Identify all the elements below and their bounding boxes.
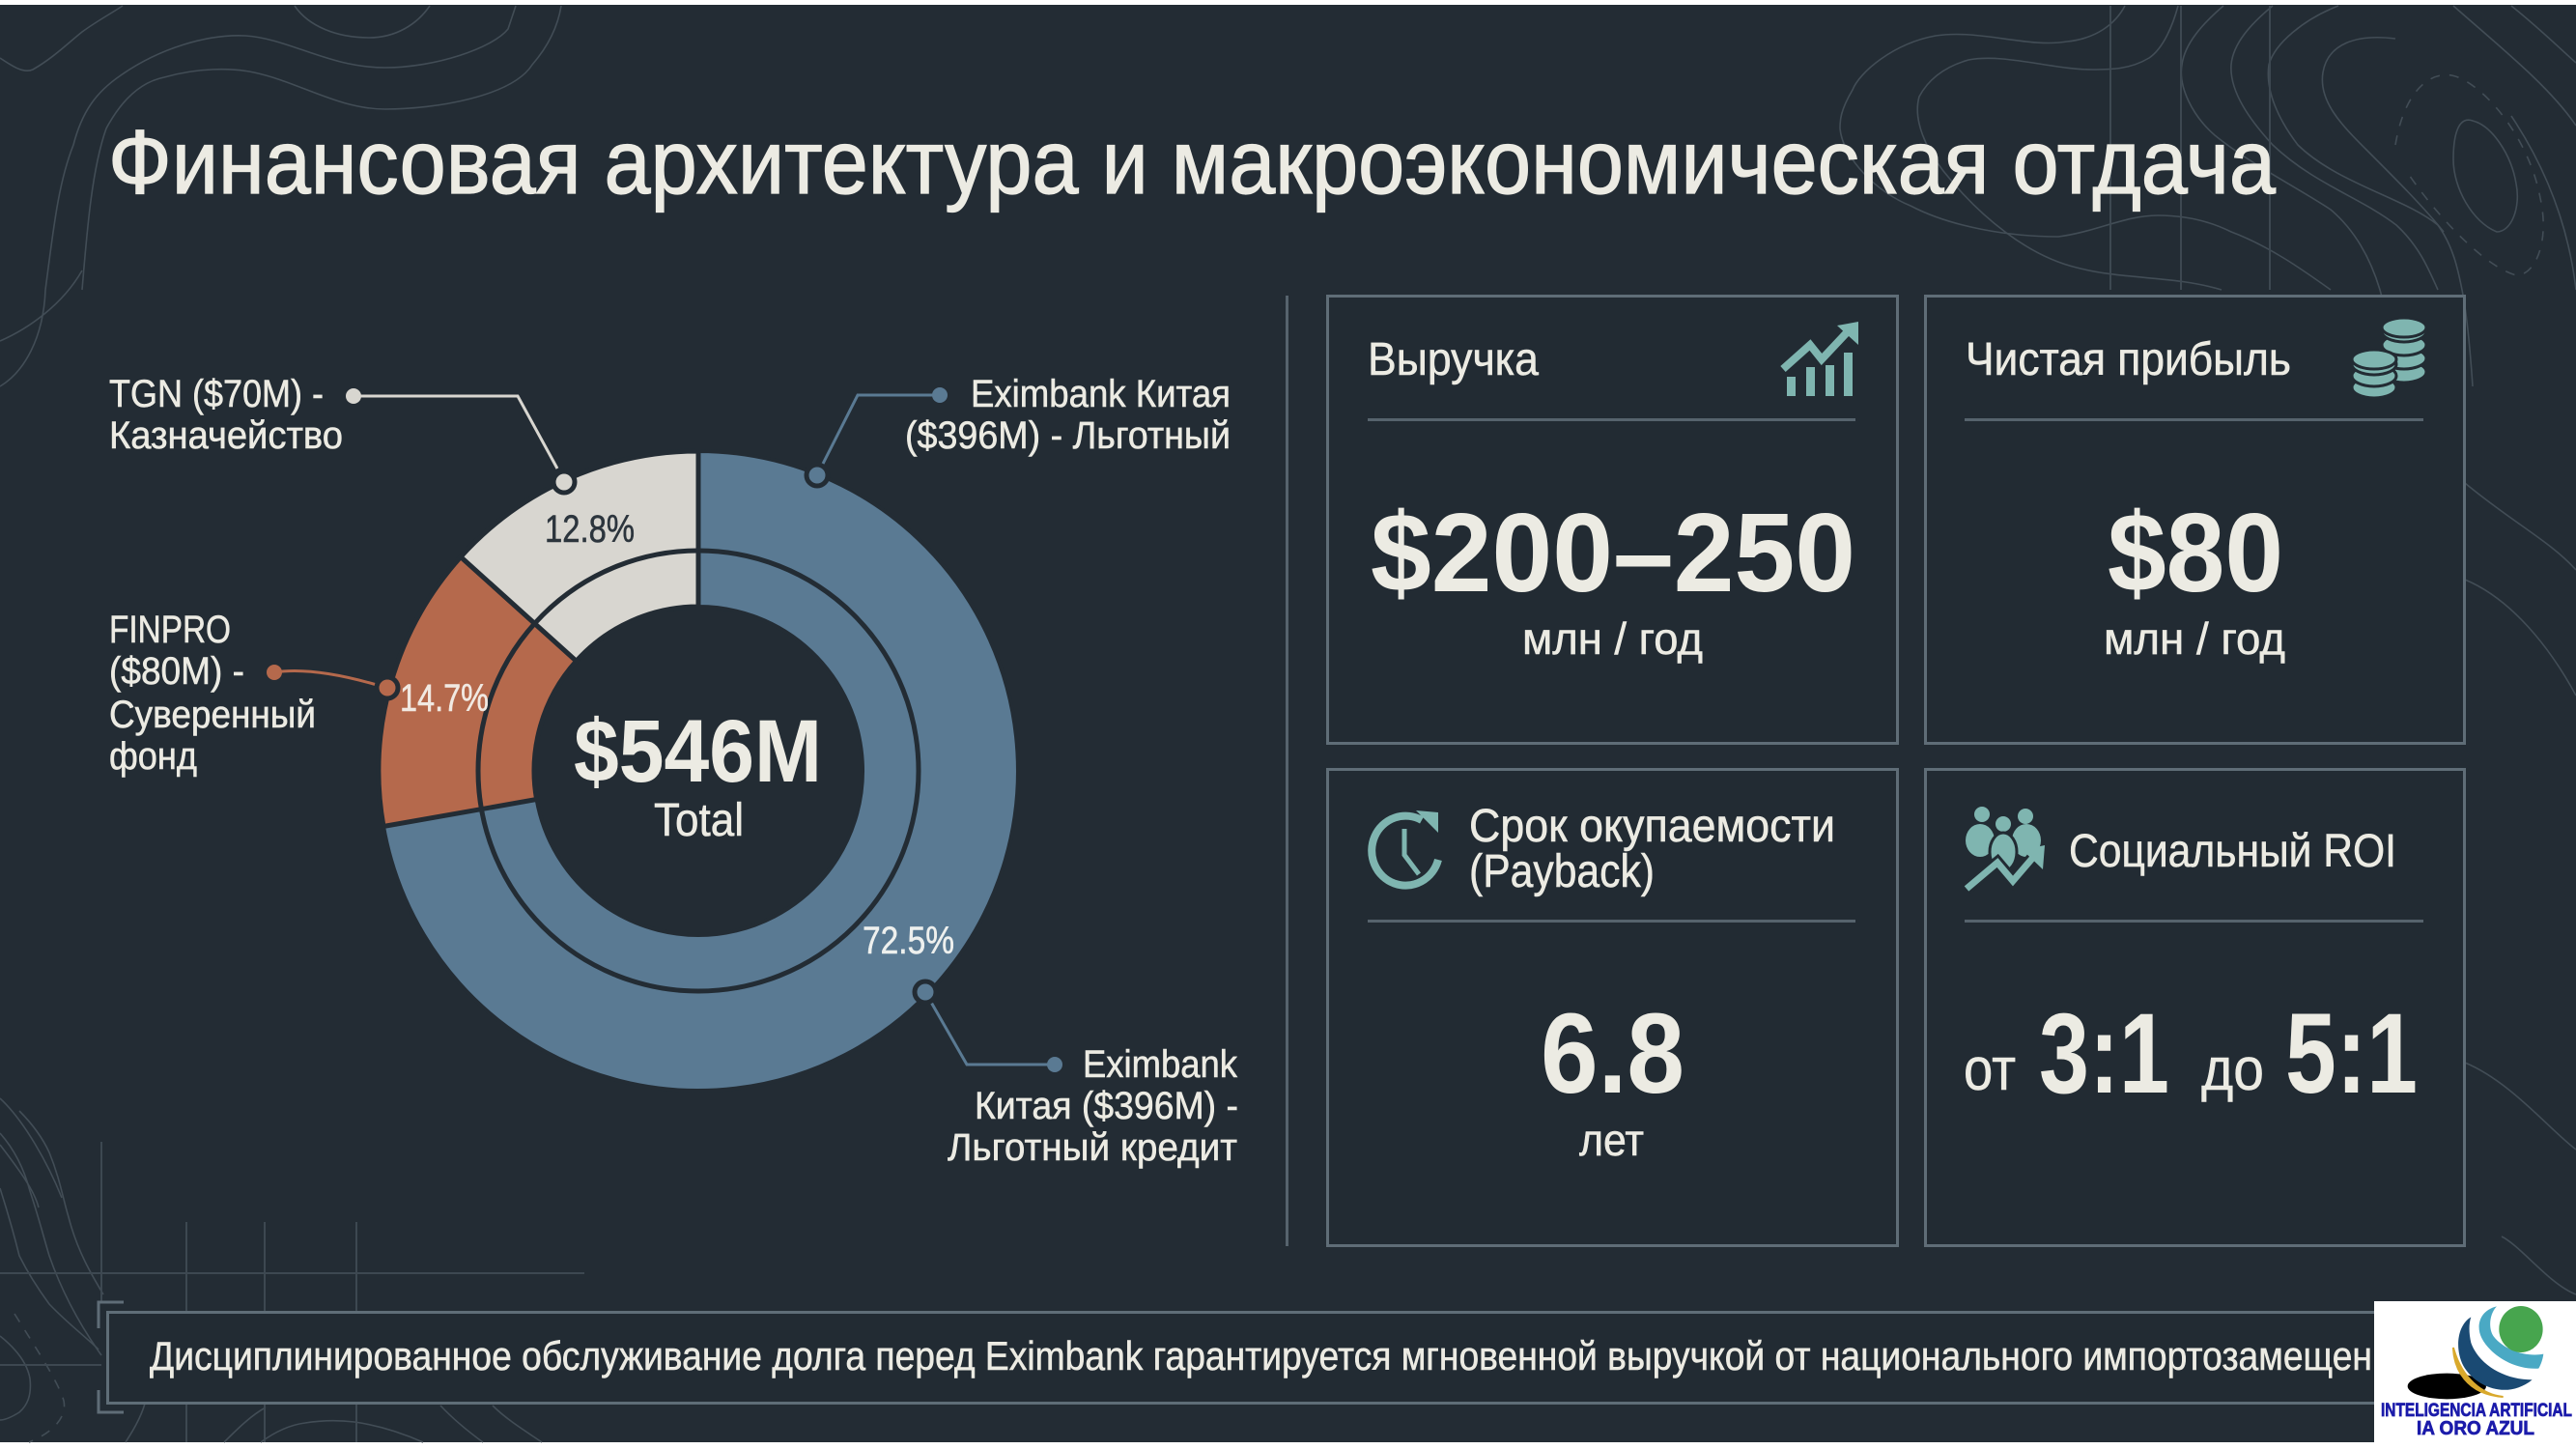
panel: revenue card	[1327, 296, 1897, 744]
percent label 72.5: 72.5%	[863, 920, 954, 962]
ROI value: до	[2201, 1037, 2264, 1103]
callout: Eximbank bottom	[915, 981, 1238, 1169]
panel: social ROI card	[1926, 769, 2465, 1246]
callout: Eximbank bottom: Льготный кредит	[948, 1126, 1237, 1169]
card heading: Срок окупаемости	[1469, 801, 1835, 852]
title: Финансовая архитектура и макроэкономическая отдача	[108, 111, 2277, 213]
donut segment: Eximbank 72.5%	[383, 451, 1018, 1091]
ROI value: от	[1964, 1037, 2016, 1103]
panel: funding donut chart	[109, 373, 1238, 1169]
divider between donut and cards	[1286, 296, 1288, 1246]
callout: FINPRO: ($80M) -	[109, 650, 244, 693]
card unit: млн / год	[1522, 613, 1703, 664]
icon: clock with arrow	[1372, 810, 1438, 886]
panel: payback card	[1327, 769, 1897, 1246]
logo: IA Oro Azul	[2374, 1301, 2576, 1442]
icon: coin stacks	[2352, 318, 2426, 398]
panel: footer statement	[99, 1302, 2426, 1412]
callout: Eximbank bottom: Китая ($396M) -	[975, 1085, 1238, 1127]
donut segment: TGN 12.8%	[461, 451, 698, 661]
callout: TGN	[109, 373, 575, 493]
callout: Eximbank top	[807, 373, 1231, 486]
callout: FINPRO: фонд	[109, 735, 197, 778]
card unit: лет	[1579, 1115, 1644, 1165]
donut centre total: $546M	[574, 702, 822, 801]
callout: Eximbank top: Eximbank Китая	[971, 373, 1231, 415]
card heading: Выручка	[1368, 334, 1539, 385]
card value: $200–250	[1371, 490, 1855, 615]
ROI value: 5:1	[2285, 990, 2418, 1118]
callout: TGN: TGN ($70M) -	[109, 373, 324, 415]
card unit: млн / год	[2104, 613, 2285, 664]
percent label 12.8: 12.8%	[545, 508, 635, 551]
donut segment: FINPRO 14.7%	[379, 556, 577, 827]
icon: rising bar chart	[1783, 322, 1858, 396]
donut inner ring	[478, 551, 919, 991]
callout: FINPRO: Суверенный	[109, 694, 316, 736]
donut centre total	[574, 702, 822, 846]
ROI value: 3:1	[2039, 990, 2169, 1118]
callout: TGN: Казначейство	[109, 414, 343, 457]
card heading: Социальный ROI	[2069, 826, 2396, 877]
card value: $80	[2108, 490, 2283, 615]
panel: net profit card	[1926, 296, 2465, 744]
icon: people with arrow	[1966, 807, 2045, 889]
callout: FINPRO: FINPRO	[109, 609, 231, 651]
card heading	[1469, 801, 1835, 897]
callout: FINPRO	[109, 609, 398, 778]
callout: Eximbank top: ($396M) - Льготный	[905, 414, 1231, 457]
card heading: (Payback)	[1469, 846, 1655, 897]
logo: IA Oro Azul: IA ORO AZUL	[2417, 1418, 2534, 1439]
callout: Eximbank bottom: Eximbank	[1083, 1043, 1238, 1086]
percent label 14.7: 14.7%	[400, 677, 489, 720]
card heading: Чистая прибыль	[1966, 334, 2291, 385]
donut centre total: Total	[654, 795, 744, 846]
card value: 6.8	[1541, 990, 1684, 1118]
ROI value	[1964, 990, 2418, 1118]
